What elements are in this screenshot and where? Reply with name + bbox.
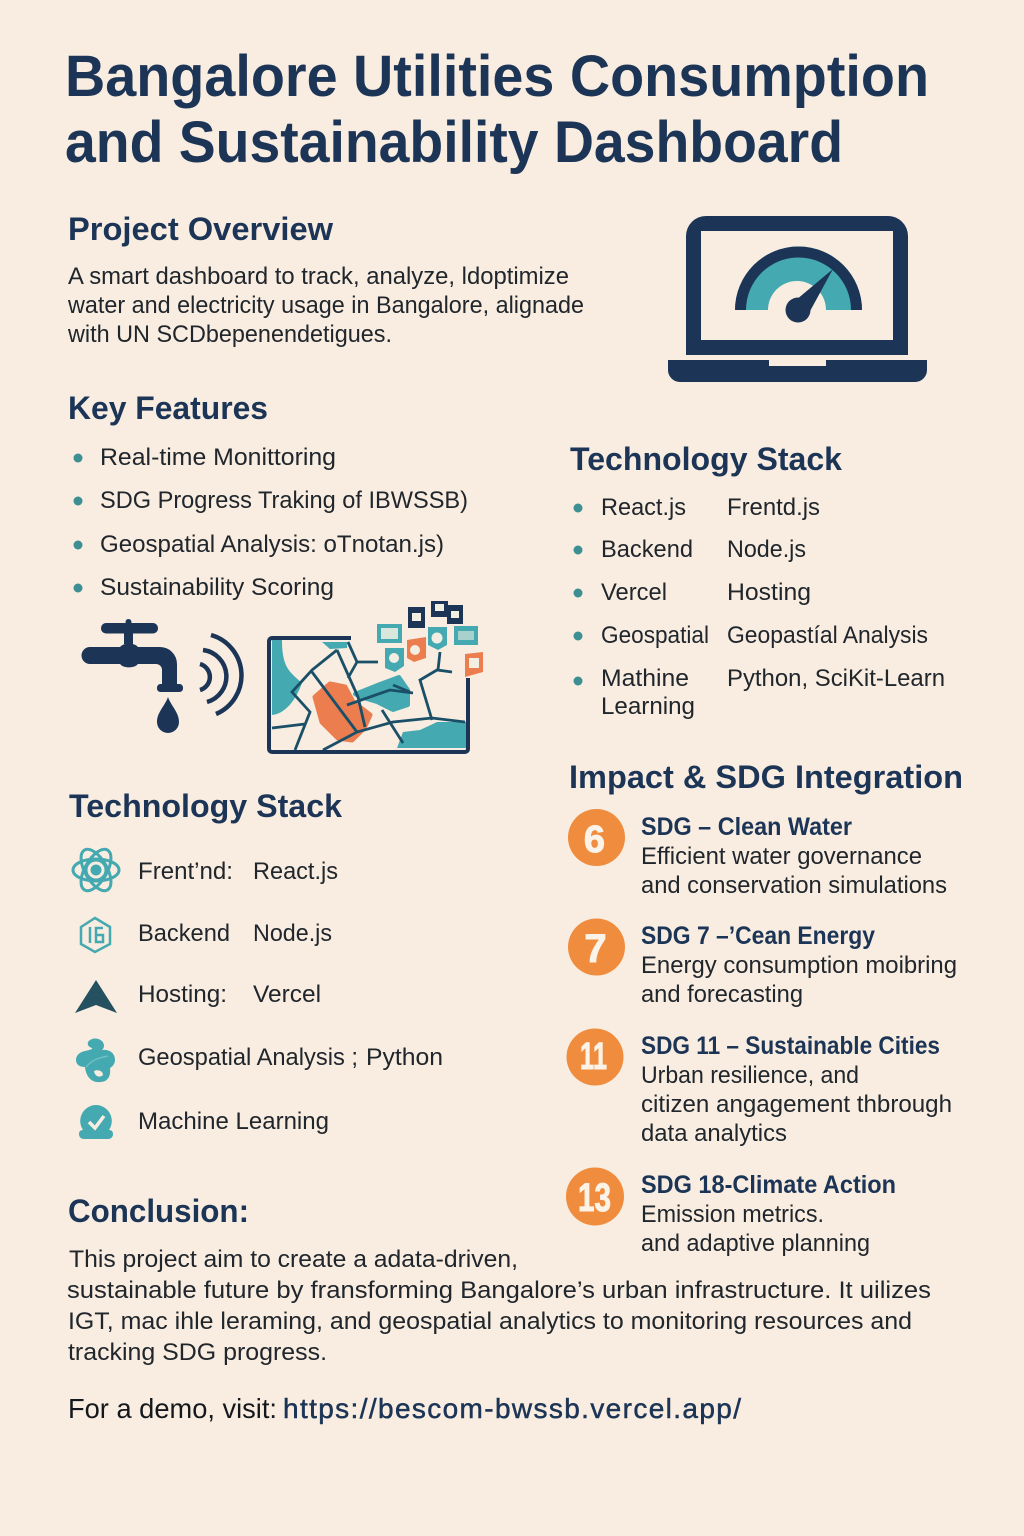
title: and Sustainability Dashboard <box>65 110 843 175</box>
panel: impact and sdg integration <box>566 759 963 1257</box>
text block: overview: A smart dashboard to track, analyze, ldoptimize <box>68 263 569 290</box>
label: backend: Node.js <box>253 920 332 947</box>
icon: machine learning badge <box>79 1105 113 1139</box>
text block: sdg 6: SDG – Clean Water <box>641 813 852 841</box>
label: geospatial: Python <box>366 1044 443 1071</box>
list: stack table: Vercel <box>601 579 667 606</box>
text block: sdg 7: SDG 7 –’Cean Energy <box>641 922 875 950</box>
text block: overview <box>67 263 584 348</box>
text block: conclusion: sustainable future by fransforming Bangalore’s urban infrastructure. It uilizes <box>67 1277 931 1304</box>
text block: sdg 11: SDG 11 – Sustainable Cities <box>641 1032 940 1060</box>
list: features: Geospatial Analysis: oTnotan.js) <box>100 531 444 558</box>
label: frontend: Frent’nd: <box>138 858 233 885</box>
list: stack table: Learning <box>601 693 695 720</box>
label: geospatial: Geospatial Analysis ; <box>138 1044 358 1071</box>
badge: sdg 6: 6 <box>584 819 605 861</box>
list: stack table: Geospatial <box>601 622 709 649</box>
text block: sdg 13: SDG 18-Climate Action <box>641 1171 896 1199</box>
label: backend: Backend <box>138 920 230 947</box>
text block: conclusion <box>67 1246 931 1366</box>
heading: key features: Key Features <box>68 390 268 426</box>
text block: sdg 13: and adaptive planning <box>641 1230 870 1257</box>
icon: water tap with signal <box>82 619 241 733</box>
text block: sdg 7 <box>641 922 957 1008</box>
text block: sdg 11 <box>641 1032 952 1147</box>
list: stack table: Node.js <box>727 536 806 563</box>
panel: technology stack right <box>570 441 945 720</box>
text block: overview: with UN SCDbepenendetigues. <box>67 321 392 348</box>
label: hosting: Vercel <box>253 981 321 1008</box>
icon: city map with markers <box>269 601 483 752</box>
label: frontend <box>138 858 338 885</box>
heading: impact: Impact & SDG Integration <box>569 759 963 795</box>
badge: sdg 11 <box>566 1028 624 1086</box>
panel: technology stack left <box>69 788 443 1139</box>
icon: vercel arrow <box>75 980 117 1013</box>
text block: sdg 6: Efficient water governance <box>641 843 922 870</box>
badge: sdg 11: 1 <box>580 1036 594 1078</box>
icon: laptop with gauge <box>668 216 927 382</box>
panel: project overview <box>67 211 584 348</box>
text block: sdg 7: Energy consumption moibring <box>641 952 957 979</box>
text block: sdg 6 <box>641 813 947 899</box>
list: features: Sustainability Scoring <box>100 574 334 601</box>
demo link: https://bescom-bwssb.vercel.app/ <box>283 1393 741 1424</box>
text block: overview: water and electricity usage in Bangalore, alignade <box>67 292 584 319</box>
demo link: For a demo, visit: <box>68 1393 277 1424</box>
heading: project overview: Project Overview <box>68 211 333 247</box>
text block: sdg 11: citizen angagement thbrough <box>641 1091 952 1118</box>
badge: sdg 7: 7 <box>584 927 607 971</box>
text block: sdg 7: and forecasting <box>641 981 803 1008</box>
badge: sdg 11: 1 <box>593 1036 607 1078</box>
heading: technology stack: Technology Stack <box>570 441 842 477</box>
label: frontend: React.js <box>253 858 338 885</box>
text block: sdg 6: and conservation simulations <box>641 872 947 899</box>
badge: sdg 6 <box>568 809 625 866</box>
text block: sdg 13: Emission metrics. <box>641 1201 824 1228</box>
list: stack table: Frentd.js <box>727 494 820 521</box>
label: hosting <box>138 981 321 1008</box>
list: stack table <box>574 494 945 720</box>
list: stack table: Mathine <box>601 665 689 692</box>
panel: conclusion <box>67 1193 931 1366</box>
text block: conclusion: This project aim to create a adata-driven, <box>69 1246 518 1273</box>
label: machine learning: Machine Learning <box>138 1108 329 1135</box>
heading: technology stack: Technology Stack <box>69 788 342 824</box>
list: features: Real-time Monittoring <box>100 444 336 471</box>
label: backend <box>138 920 332 947</box>
label: hosting: Hosting: <box>138 981 227 1008</box>
list: features <box>74 444 468 601</box>
list: stack table: Geopastíal Analysis <box>727 622 928 649</box>
text block: sdg 13 <box>641 1171 896 1257</box>
heading: conclusion: Conclusion: <box>68 1193 249 1229</box>
list: stack table: Backend <box>601 536 693 563</box>
text block: sdg 11: Urban resilience, and <box>641 1062 859 1089</box>
panel: key features <box>68 390 468 601</box>
title: Bangalore Utilities Consumption <box>65 44 929 109</box>
icon: python <box>76 1038 115 1082</box>
list: stack table: Hosting <box>727 579 811 606</box>
list: features: SDG Progress Traking of IBWSSB) <box>100 487 468 514</box>
list: stack table: React.js <box>601 494 686 521</box>
list: stack table: Python, SciKit-Learn <box>727 665 945 692</box>
badge: sdg 7 <box>568 918 625 976</box>
text block: conclusion: IGT, mac ihle leraming, and geospatial analytics to monitoring resources and <box>68 1308 912 1335</box>
text block: conclusion: tracking SDG progress. <box>68 1339 327 1366</box>
badge: sdg 13 <box>566 1168 624 1226</box>
icon: react atom <box>73 845 119 895</box>
demo link <box>68 1393 741 1424</box>
badge: sdg 13: 13 <box>578 1176 611 1220</box>
title <box>65 44 929 175</box>
text block: sdg 11: data analytics <box>641 1120 787 1147</box>
icon: node hexagon <box>81 918 110 952</box>
